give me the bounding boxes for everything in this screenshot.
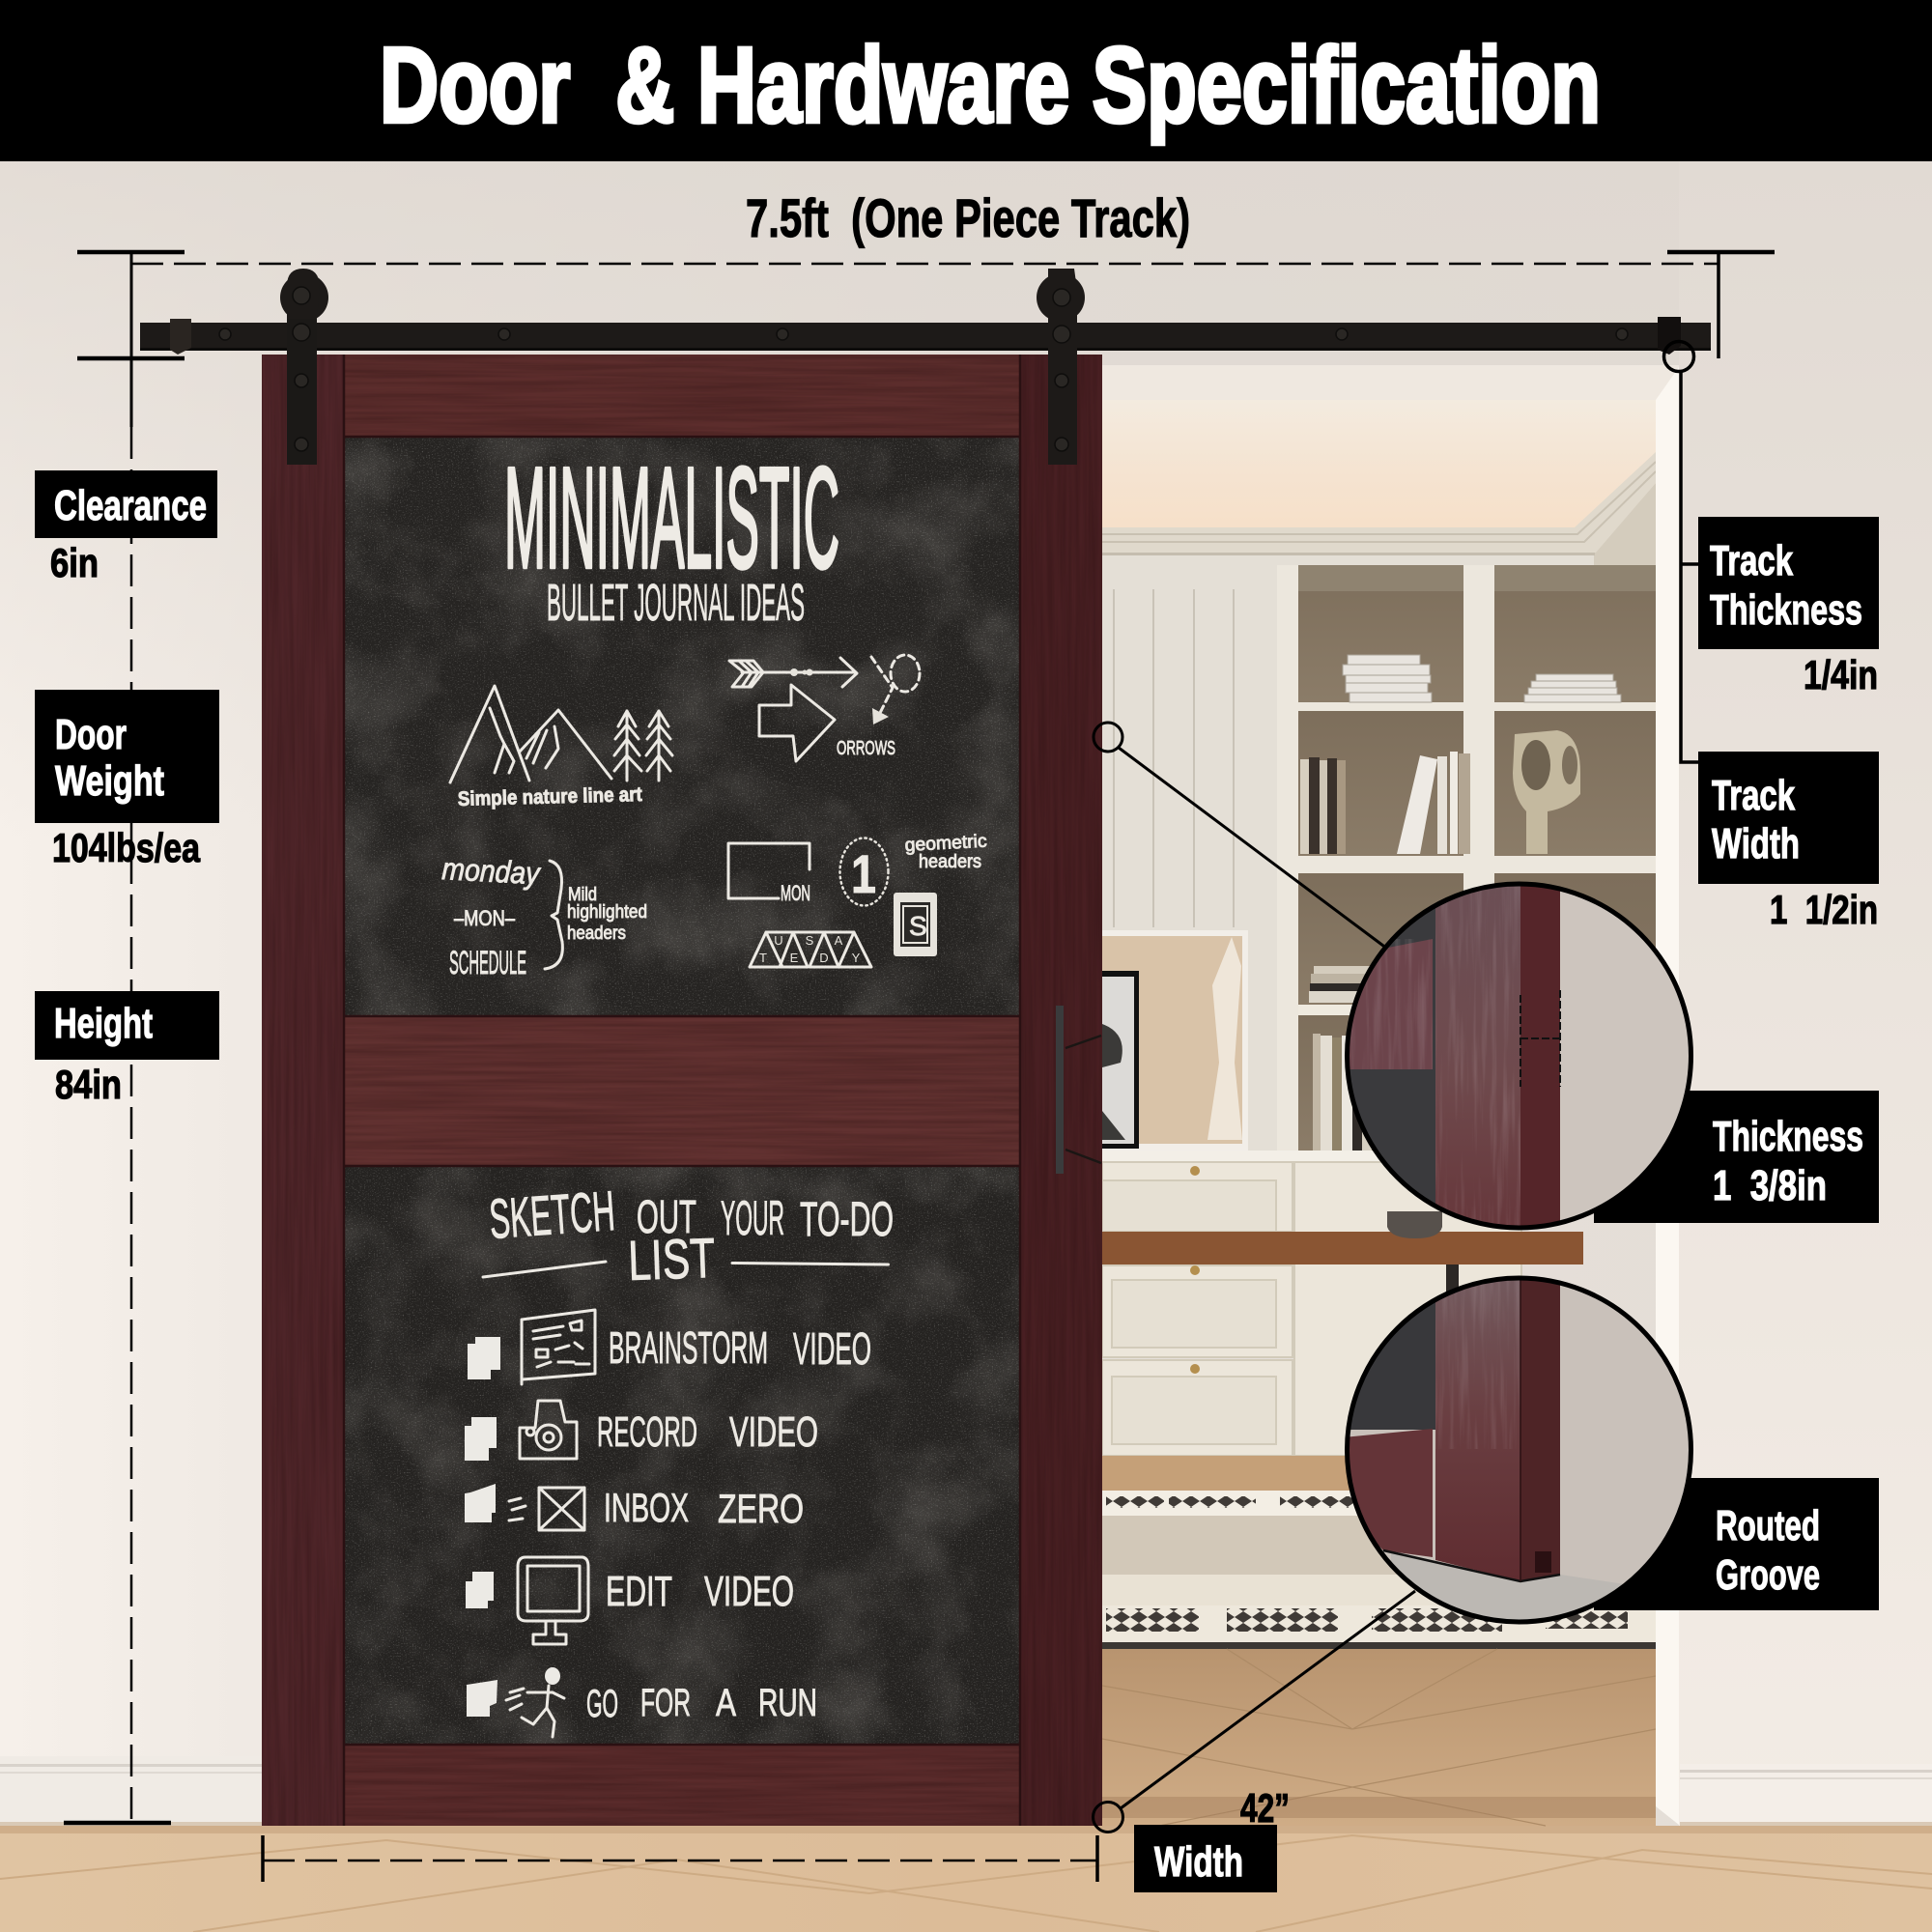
brass knobs (1190, 1166, 1200, 1374)
left door hanger (280, 269, 328, 465)
arrow tip (872, 708, 889, 724)
left baseboard (0, 1756, 262, 1826)
upper chalk artwork: SCHEDULE (449, 945, 526, 981)
item: edit: EDIT (606, 1568, 672, 1615)
label: track thickness: Thickness (1710, 586, 1862, 634)
monitor icon (518, 1557, 588, 1644)
track rail (140, 317, 1711, 355)
rug edge (1102, 1642, 1656, 1649)
right wall (1679, 161, 1932, 1826)
TUESDAY bunting: Y (852, 951, 861, 965)
value: width: 42” (1240, 1785, 1290, 1831)
right baseboard (1680, 1764, 1932, 1826)
counter top (1102, 1151, 1431, 1162)
label: width: Width (1154, 1838, 1243, 1886)
title banner (0, 0, 1932, 161)
left stile (262, 355, 344, 1826)
chalk smudge upper (344, 437, 1020, 1016)
pine trees (614, 711, 672, 781)
track bolts (219, 328, 1628, 340)
lower chalkboard panel (344, 1166, 1020, 1745)
TUESDAY bunting: A (835, 933, 843, 948)
title: Door & Hardware Specification (380, 26, 1601, 145)
item: run: RUN (758, 1682, 817, 1724)
item: run: FOR (640, 1682, 691, 1724)
track length dimension (131, 252, 1775, 358)
label: track thickness: Track (1710, 537, 1793, 584)
label: door weight (35, 690, 219, 823)
checkbox 5 (467, 1680, 497, 1717)
detail lens: routed groove (1343, 1275, 1700, 1633)
TUESDAY bunting (750, 932, 871, 967)
chalk caption: headers: headers (567, 923, 626, 944)
thickness callout leader (1094, 723, 1387, 949)
door pull handle (1056, 1006, 1101, 1174)
back wall (1102, 553, 1656, 1171)
camera icon (520, 1401, 577, 1459)
wall under diagonal crown (1594, 483, 1656, 565)
upper chalk artwork: MINIMALISTIC (504, 439, 839, 598)
board icon (522, 1310, 595, 1384)
chalk caption: line art: Simple nature line art (458, 783, 642, 810)
wood grain vertical right (1020, 355, 1102, 1826)
dashed loop (891, 655, 920, 692)
chalk heading: sketch out: OUT (637, 1192, 696, 1243)
label: thickness (1594, 1091, 1879, 1223)
right stile (1020, 355, 1102, 1826)
block arrow (759, 685, 835, 761)
value: track thickness: 1/4in (1804, 652, 1878, 697)
chalk brace (545, 861, 562, 969)
label: door weight: Door (55, 711, 127, 758)
chalk heading: sketch out: SKETCH (487, 1179, 617, 1251)
interior wood floor (1102, 1649, 1656, 1826)
checkbox 3 (465, 1484, 496, 1522)
label: track width: Track (1712, 772, 1795, 819)
item: inbox: ZERO (718, 1486, 804, 1531)
chalk monday: monday (441, 851, 542, 891)
checkbox 4 (466, 1572, 494, 1608)
bookcase cell 6 (1494, 873, 1656, 1163)
TUESDAY bunting: U (774, 933, 783, 948)
label: height: Height (54, 1000, 153, 1047)
item: record: RECORD (597, 1408, 697, 1456)
item: run: GO (586, 1683, 618, 1725)
mountains drawing (450, 686, 611, 782)
number one: 1 (851, 843, 876, 904)
interior room scene (1102, 365, 1679, 1826)
label: track width (1698, 752, 1879, 884)
door frame jamb (1656, 367, 1679, 1825)
stacked books (1343, 655, 1621, 702)
chalk specks upper (344, 437, 1020, 1016)
bookcase cell 1 (1298, 565, 1463, 702)
label: clearance (35, 470, 217, 538)
top rail (344, 355, 1020, 437)
item: inbox: INBOX (604, 1485, 689, 1530)
chalk MON header: MON (781, 881, 810, 905)
list underlines (483, 1262, 889, 1277)
desk top (1102, 1232, 1583, 1264)
label: door weight: Weight (55, 757, 164, 805)
wood grain vertical (262, 355, 344, 1826)
feathered arrow (729, 658, 857, 687)
item: run (586, 1682, 817, 1725)
chalk heading: sketch out: TO-DO (800, 1192, 894, 1246)
track callout leader (1663, 342, 1699, 762)
wood grain top (344, 355, 1020, 437)
books on lower shelf (1298, 966, 1395, 1151)
envelope icon (539, 1488, 584, 1530)
bookcase cell 5 (1298, 873, 1463, 1005)
chalk caption: arrows: ORROWS (837, 738, 895, 759)
checkbox 2 (465, 1417, 497, 1461)
bowl (1387, 1211, 1442, 1238)
item: brainstorm: BRAINSTORM (609, 1322, 768, 1373)
upright books (1300, 752, 1470, 854)
chalk smudge lower (344, 1166, 1020, 1745)
item: inbox (604, 1485, 804, 1531)
checkbox 1 (468, 1337, 500, 1379)
shadow strips (1298, 565, 1656, 591)
clearance dimension (64, 252, 185, 1823)
chalk heading: sketch out: YOUR (721, 1191, 784, 1245)
stile seams (344, 355, 1020, 1826)
chalk caption: highlighted: highlighted (567, 902, 647, 923)
label: clearance: Clearance (54, 482, 207, 529)
bookcase cell 3 (1298, 711, 1463, 856)
dotted number circle (840, 838, 889, 906)
wood grain middle (344, 1016, 1020, 1166)
S tile (894, 893, 937, 956)
bookcase cell 4 (1494, 711, 1656, 856)
track length label: 7.5ft (One Piece Track) (746, 187, 1190, 248)
value: clearance: 6in (50, 540, 99, 585)
chalk caption: headers 2: headers (919, 852, 981, 872)
right stopper (1658, 317, 1681, 355)
label: thickness: Thickness (1713, 1113, 1863, 1160)
chalk MON: –MON– (454, 906, 516, 930)
door base (262, 355, 1102, 1826)
lower chalk artwork (465, 1179, 894, 1737)
rug (1102, 1491, 1656, 1648)
bookcase cell 7 (1298, 1015, 1395, 1151)
upper chalkboard panel (344, 437, 1020, 1016)
routed groove callout leader (1094, 1591, 1415, 1832)
bookcase frame (1277, 565, 1656, 1164)
item: brainstorm: VIDEO (793, 1323, 871, 1374)
detail lens: door thickness (1343, 879, 1700, 1236)
bracket header frame (728, 843, 810, 898)
wall top shading (0, 161, 1679, 838)
wood floor (0, 1826, 1932, 1932)
door width dimension (263, 1835, 1097, 1882)
ceiling glow (1102, 400, 1656, 529)
label: thickness: 1 3/8in (1713, 1162, 1827, 1209)
dashed path to arrow (871, 657, 893, 713)
TUESDAY bunting: E (790, 951, 799, 965)
cabinets (1102, 1162, 1521, 1456)
label: routed groove: Routed (1716, 1502, 1820, 1549)
bookcase cell 2 (1494, 565, 1656, 702)
label: routed groove (1594, 1478, 1879, 1610)
value: height: 84in (55, 1062, 122, 1107)
value: track width: 1 1/2in (1770, 887, 1878, 932)
barn door (262, 355, 1102, 1826)
chalk heading: sketch out (487, 1179, 894, 1251)
soffit (1102, 365, 1679, 400)
crown molding (1102, 452, 1656, 555)
desk leg (1446, 1264, 1459, 1322)
item: edit: VIDEO (704, 1568, 794, 1615)
wall panel lines (1114, 589, 1234, 927)
wood grain bottom (344, 1745, 1020, 1826)
bottom rail (344, 1745, 1020, 1826)
label: height (35, 991, 219, 1060)
TUESDAY bunting: S (806, 933, 814, 948)
chalk specks lower (344, 1166, 1020, 1745)
label: track width: Width (1712, 820, 1800, 867)
item: record: VIDEO (729, 1408, 818, 1456)
speed lines 1 (509, 1498, 526, 1520)
upper chalk artwork (441, 439, 987, 981)
right door hanger (1037, 269, 1085, 465)
chalk caption: geometric: geometric (904, 832, 987, 856)
chalk heading: list: LIST (627, 1227, 716, 1293)
TUESDAY bunting: D (819, 951, 829, 965)
runner icon (506, 1667, 564, 1737)
middle rail (344, 1016, 1020, 1166)
item: run: A (716, 1682, 736, 1724)
label: width (1134, 1825, 1277, 1892)
label: routed groove: Groove (1716, 1551, 1820, 1599)
left stopper (170, 319, 191, 355)
arrow beads (790, 668, 813, 676)
item: edit (606, 1568, 794, 1615)
upper chalk artwork: BULLET JOURNAL IDEAS (547, 574, 805, 632)
rug pattern (1106, 1496, 1628, 1632)
sculpture (1513, 730, 1580, 854)
label: track thickness (1698, 517, 1879, 649)
framed art (1102, 930, 1248, 1151)
chalk caption: mild: Mild (568, 885, 597, 905)
TUESDAY bunting: T (759, 951, 767, 965)
floor behind rug (1102, 1456, 1656, 1491)
value: door weight: 104lbs/ea (52, 825, 201, 870)
S tile: S (909, 911, 927, 941)
